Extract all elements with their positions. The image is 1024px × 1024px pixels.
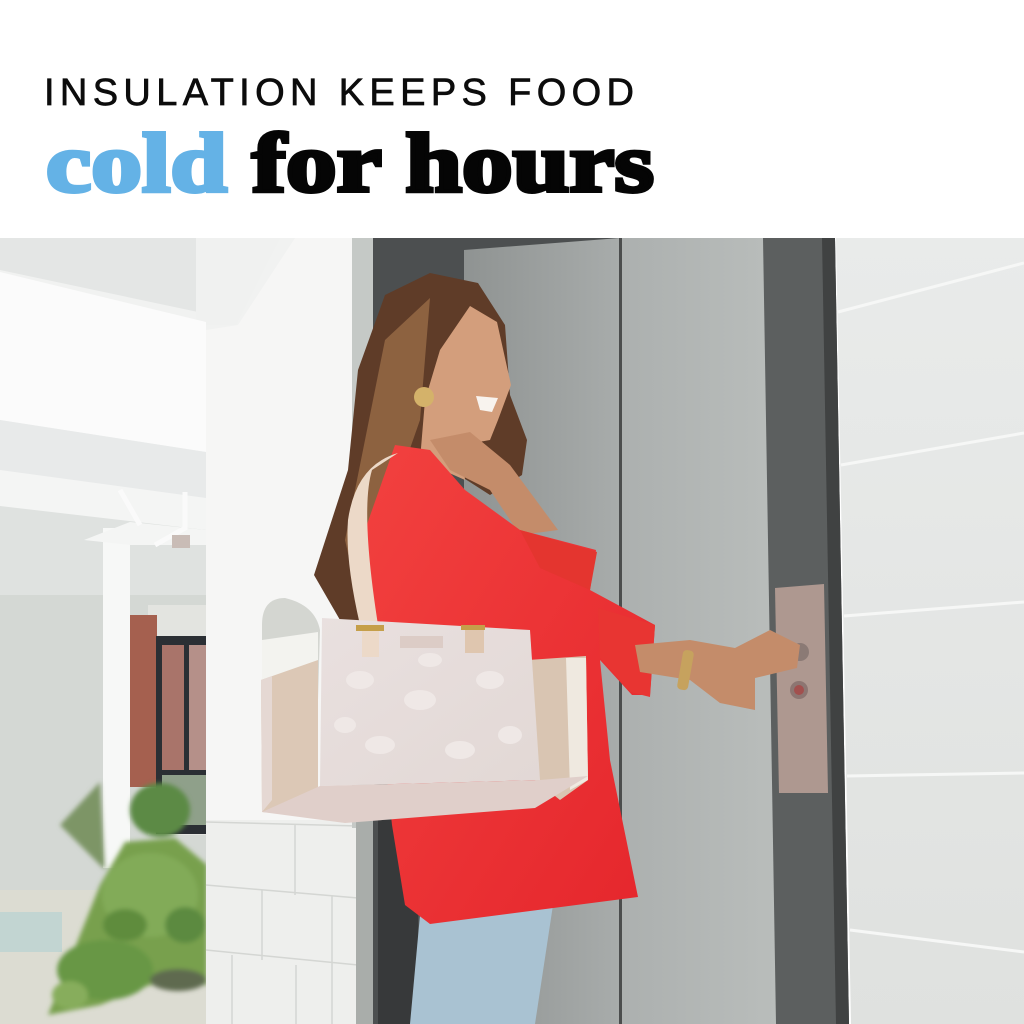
bottom trim <box>262 776 588 823</box>
woman <box>314 273 800 1024</box>
arm and hand on button <box>635 630 800 710</box>
door frame <box>763 238 849 1024</box>
bracelets <box>677 649 694 691</box>
face and neck <box>420 306 511 480</box>
main body <box>320 618 540 786</box>
title <box>44 72 654 210</box>
strap <box>348 453 398 625</box>
floor <box>0 890 206 1024</box>
right cinder-block wall <box>836 238 1024 1024</box>
heading line: insulation keeps food: INSULATION KEEPS FOOD <box>44 72 634 114</box>
right pocket <box>528 656 588 800</box>
heading line: cold for hours: cold <box>46 117 227 210</box>
white brick pillar <box>206 238 380 1024</box>
white pillar <box>103 528 130 868</box>
strap tabs and label <box>362 625 379 657</box>
jeans <box>410 905 553 1024</box>
red blazer <box>365 445 655 924</box>
elevator <box>373 238 849 1024</box>
hair <box>314 273 527 625</box>
brick column <box>130 615 157 787</box>
pattern <box>334 653 522 759</box>
heading line: cold for hours: for hours <box>252 117 654 210</box>
door right <box>622 238 776 1024</box>
tote bag <box>261 453 588 823</box>
photo: woman with tote bag at elevator <box>0 238 1024 1024</box>
earring <box>414 387 434 407</box>
plants <box>48 782 207 1015</box>
window <box>156 636 206 834</box>
hand at chin <box>430 432 558 535</box>
button panel <box>775 584 828 793</box>
heading line: cold for hours <box>46 117 654 210</box>
left pocket <box>261 660 325 818</box>
background loft room <box>0 238 360 1024</box>
water bottle <box>262 598 320 700</box>
